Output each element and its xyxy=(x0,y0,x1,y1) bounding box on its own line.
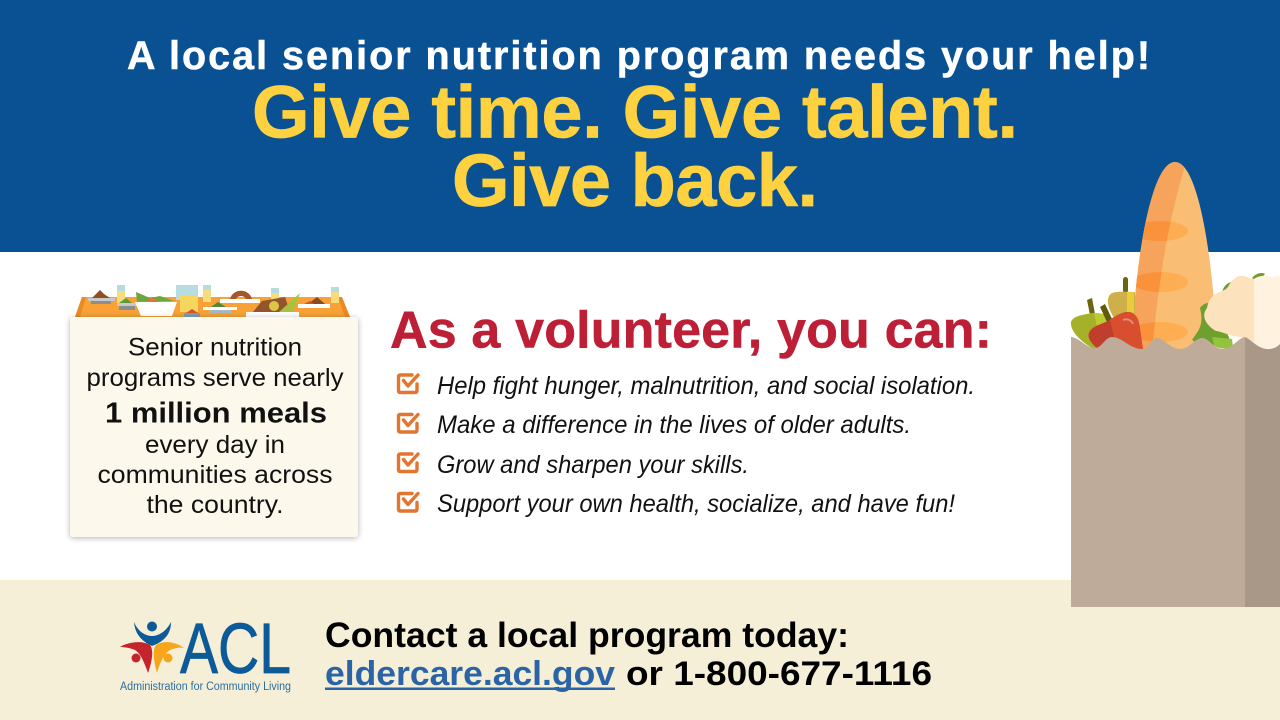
table of food illustration xyxy=(75,285,350,317)
item 3: Grow and sharpen your skills. xyxy=(437,451,749,479)
headline xyxy=(252,70,1018,222)
grocery bag illustration xyxy=(1071,150,1280,607)
contact text xyxy=(325,616,932,693)
fact text: communities across xyxy=(98,461,332,489)
baguette xyxy=(1135,162,1217,349)
headline: Give back. xyxy=(452,139,818,222)
footer band xyxy=(0,580,1280,720)
contact text: Contact a local program today: xyxy=(325,616,849,655)
volunteer heading: As a volunteer, you can: xyxy=(390,302,992,360)
paper bag side xyxy=(1245,337,1280,607)
item 4: Support your own health, socialize, and have fun! xyxy=(437,490,955,518)
item 1: Help fight hunger, malnutrition, and social isolation. xyxy=(437,372,975,400)
paper bag xyxy=(1071,337,1245,607)
cauliflower xyxy=(1192,273,1280,349)
fact text: every day in xyxy=(145,431,285,459)
ACL logo xyxy=(120,610,291,693)
contact text: or 1-800-677-1116 xyxy=(626,655,932,693)
fact text xyxy=(86,334,344,519)
fact text: 1 million meals xyxy=(105,398,327,430)
header band xyxy=(0,0,1280,252)
logo tagline: Administration for Community Living xyxy=(120,681,291,693)
volunteer checklist xyxy=(398,372,975,518)
peppers and apples xyxy=(1071,277,1143,349)
header subtitle: A local senior nutrition program needs your help! xyxy=(127,34,1150,78)
logo wordmark: ACL xyxy=(180,610,291,689)
headline: Give time. Give talent. xyxy=(252,70,1018,154)
fact text: the country. xyxy=(146,491,284,519)
fact text: programs serve nearly xyxy=(86,364,344,392)
fact text: Senior nutrition xyxy=(128,334,302,362)
website link: eldercare.acl.gov xyxy=(325,655,615,693)
fact card xyxy=(70,317,358,537)
item 2: Make a difference in the lives of older adults. xyxy=(437,411,911,439)
logo figures xyxy=(120,622,184,673)
